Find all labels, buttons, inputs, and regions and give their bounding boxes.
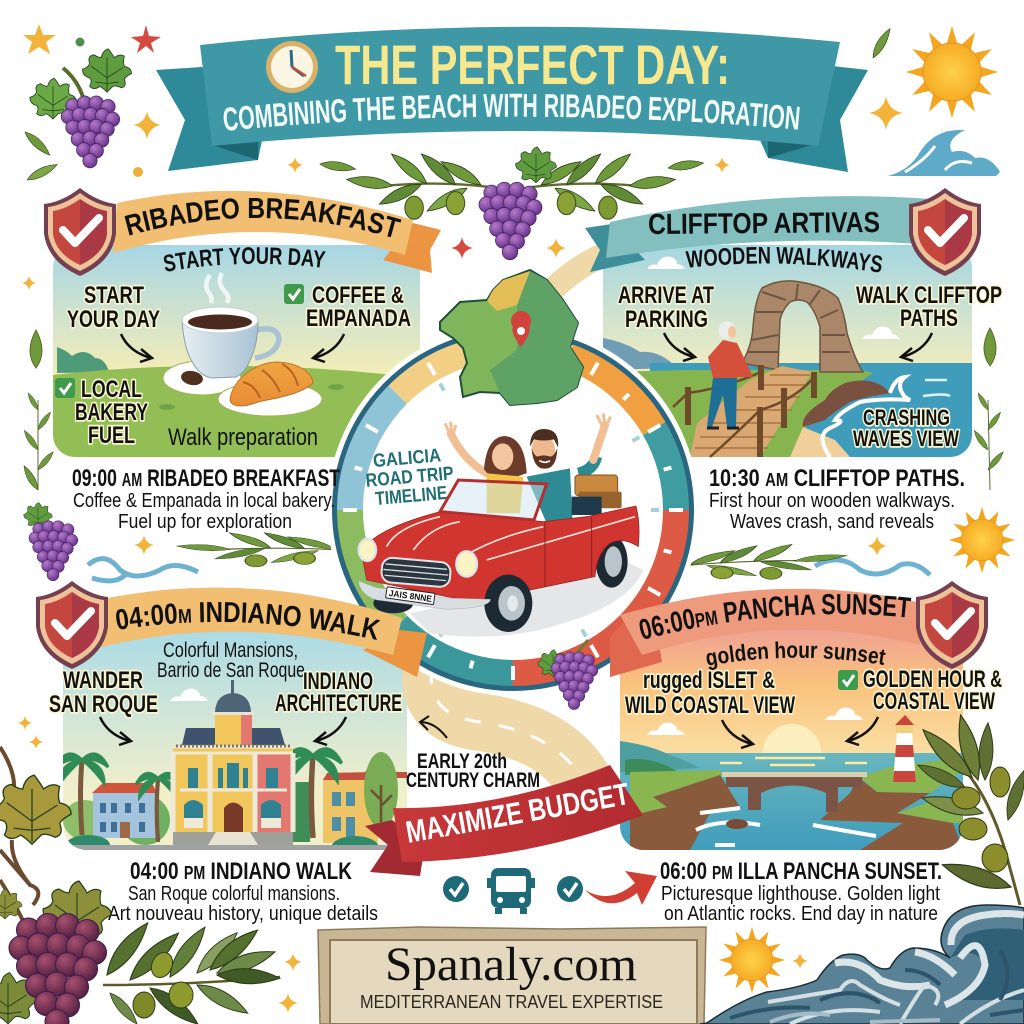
- panel scene background: [603, 245, 972, 463]
- panel text: Pancha sunset labels: [624, 642, 1003, 750]
- decorative side elements left: [21, 330, 345, 581]
- winding road: [431, 668, 592, 800]
- panel: Ribadeo breakfast: [53, 245, 420, 457]
- headlights: [359, 539, 477, 577]
- wave: [700, 905, 1024, 1024]
- time block: Illa Pancha sunset: 06:00 PM ILLA PANCHA SUNSET.: [660, 858, 942, 885]
- road piece toward the map: [548, 254, 605, 295]
- brand name: Spanaly.com: [385, 938, 637, 991]
- map of Galicia: [440, 270, 583, 405]
- wheels: [373, 593, 413, 613]
- windshield: [440, 480, 547, 520]
- label: Galicia road trip timeline: TIMELINE: [375, 483, 448, 510]
- licence plate: JAIS 8NNE: [388, 588, 433, 604]
- arrow: [664, 333, 695, 361]
- bottom-left vine, leaves, grapes, olive branch: [0, 716, 302, 1024]
- time block: Ribadeo breakfast: Coffee & Empanada in local bakery.: [73, 489, 335, 512]
- illustration: couple in red convertible: [358, 413, 643, 637]
- icon: lighthouse: [893, 715, 916, 782]
- decorative side elements right: [676, 328, 1015, 583]
- road shadow: [410, 560, 643, 637]
- panel text: Indiano walk labels: WANDER: [63, 667, 143, 694]
- footer plaque: [318, 927, 706, 1024]
- label: local bakery fuel: [55, 376, 148, 449]
- decorative corner cluster: top left grapes: [22, 24, 161, 290]
- label: start your day: START: [84, 282, 144, 309]
- title banner: [156, 26, 868, 172]
- label: crashing waves view: WAVES VIEW: [853, 426, 959, 451]
- label: crashing waves view: [853, 405, 959, 451]
- label: local bakery fuel: LOCAL: [81, 376, 142, 403]
- tagline: MEDITERRANEAN TRAVEL EXPERTISE: [360, 992, 663, 1012]
- ribbon: 04:00M Indiano walk: 04:00M INDIANO WALK: [116, 602, 380, 640]
- time block: Clifftop paths: [709, 465, 965, 533]
- timeline ring ticks: [343, 363, 683, 680]
- icon: shield check: [916, 581, 988, 669]
- time block: Indiano walk: [108, 858, 378, 925]
- label: local bakery fuel: FUEL: [88, 422, 135, 449]
- label: crashing waves view: CRASHING: [863, 405, 950, 430]
- arrow: [420, 716, 447, 738]
- subtitle on curved path: COMBINING THE BEACH WITH RIBADEO EXPLORATION: [224, 94, 800, 131]
- panel text: Indiano walk labels: [49, 639, 402, 745]
- label: walk clifftop paths: [856, 282, 1002, 332]
- ribbon: 04:00M Indiano walk: [100, 588, 427, 677]
- time block: Ribadeo breakfast: [72, 465, 340, 533]
- time block: Indiano walk: San Roque colorful mansions.: [128, 882, 340, 905]
- panel text: Indiano walk labels: ARCHITECTURE: [275, 690, 402, 717]
- icon: wooden walkway: [673, 365, 814, 457]
- icon: hiker: [707, 322, 753, 428]
- panel text: Indiano walk labels: Barrio de San Roque: [157, 659, 305, 682]
- arrow: [901, 333, 932, 361]
- icon: shield check: [909, 188, 981, 276]
- road and timeline hub: [327, 270, 699, 800]
- time block: Illa Pancha sunset: Picturesque lighthouse. Golden light: [661, 882, 940, 905]
- label: coffee and empanada: [284, 282, 411, 332]
- icon: coffee cup: [163, 273, 279, 395]
- bottom-right wave, sun, olive branch: [700, 713, 1024, 1024]
- car trim: [387, 517, 635, 560]
- label: wooden walkways heading: WOODEN WALKWAYS: [685, 247, 882, 272]
- icon row: bus and checks: [443, 868, 657, 914]
- label: arrive at parking: ARRIVE AT: [618, 282, 714, 309]
- grille: [381, 557, 451, 588]
- arrow: red: [585, 871, 657, 905]
- olive branch: right: [915, 713, 1024, 905]
- arrow: [121, 334, 152, 362]
- label: arrive at parking: PARKING: [625, 306, 708, 333]
- label: Galicia road trip timeline: GALICIA: [372, 445, 442, 472]
- icon: shield check: [44, 188, 116, 276]
- time block: Indiano walk: 04:00 PM INDIANO WALK: [130, 858, 353, 885]
- time block: Illa Pancha sunset: [660, 858, 942, 925]
- time block: Ribadeo breakfast: 09:00 AM RIBADEO BREAKFAST: [72, 465, 340, 492]
- label: walk clifftop paths: PATHS: [900, 305, 958, 332]
- time block: Clifftop paths: First hour on wooden walkways.: [709, 489, 955, 512]
- icon: bus: [487, 868, 535, 914]
- panel text: Pancha sunset labels: WILD COASTAL VIEW: [625, 692, 795, 719]
- icon: clock: [266, 41, 318, 93]
- ribbon: Clifftop Artivas: CLIFFTOP ARTIVAS: [648, 207, 880, 241]
- panel scene: Indiano walk: [56, 625, 407, 860]
- label: start your day: [67, 282, 160, 333]
- icon: shield check: [36, 581, 108, 669]
- panel text: Indiano walk labels: Colorful Mansions,: [163, 639, 298, 662]
- panel text: Pancha sunset labels: rugged ISLET &: [643, 667, 775, 694]
- bumper: [358, 581, 491, 609]
- label: walk preparation: Walk preparation: [168, 424, 318, 451]
- title text: THE PERFECT DAY:: [335, 33, 730, 96]
- banner: maximize budget: [365, 765, 643, 876]
- ribbon: 06:00PM Pancha sunset: 06:00PM PANCHA SUNSET: [640, 594, 912, 639]
- time block: Clifftop paths: 10:30 AM CLIFFTOP PATHS.: [709, 465, 965, 492]
- label: arrive at parking: [618, 282, 714, 333]
- time block: Ribadeo breakfast: Fuel up for exploration: [118, 510, 292, 533]
- label: early 20th century charm: EARLY 20th: [417, 750, 507, 773]
- timeline ring segments: [350, 353, 676, 673]
- couple: [445, 413, 611, 523]
- time block: Indiano walk: Art nouveau history, unique details: [108, 902, 378, 925]
- luggage: [572, 475, 622, 515]
- ribbon: 06:00PM Pancha sunset: [610, 588, 920, 677]
- timeline ring outline: [335, 332, 691, 688]
- ribbon: Ribadeo Breakfast: RIBADEO BREAKFAST: [124, 198, 402, 238]
- decorative grapes on ring: [538, 640, 598, 710]
- panel text: Indiano walk labels: SAN ROQUE: [49, 691, 158, 718]
- decorative top centre vine with grapes: [287, 147, 730, 260]
- ribbon: Ribadeo Breakfast: [113, 190, 441, 273]
- panel text: Indiano walk labels: INDIANO: [303, 668, 373, 695]
- panel scene background: [53, 245, 420, 457]
- car body: [362, 506, 639, 603]
- time block: Illa Pancha sunset: on Atlantic rocks. End day in nature: [664, 902, 938, 925]
- label: start your day: YOUR DAY: [67, 306, 160, 333]
- panel scene: Pancha sunset: [620, 625, 963, 853]
- panel: Clifftop Artivas: [603, 245, 1003, 458]
- icon: stone arch: [742, 281, 863, 372]
- time block: Clifftop paths: Waves crash, sand reveals: [730, 510, 934, 533]
- banner: maximize budget: MAXIMIZE BUDGET: [403, 776, 632, 850]
- road centre dashes: [431, 668, 592, 800]
- ribbon: Clifftop Artivas: [585, 196, 945, 272]
- white ring halo: [327, 324, 699, 696]
- arrow: [313, 334, 344, 362]
- label: start your day heading: START YOUR DAY: [164, 247, 326, 272]
- panel text: Pancha sunset labels: golden hour sunset: [706, 642, 886, 670]
- icon: Indiano mansion: [173, 680, 293, 845]
- label: coffee and empanada: COFFEE &: [312, 282, 404, 309]
- label: Galicia road trip timeline: ROAD TRIP: [365, 463, 455, 492]
- icon: stone bridge: [722, 772, 867, 812]
- icon: croissant on plate: [218, 362, 322, 416]
- label: local bakery fuel: BAKERY: [75, 399, 148, 426]
- label: early 20th century charm: CENTURY CHARM: [406, 769, 540, 792]
- label: early 20th century charm: [406, 750, 540, 792]
- decorative top-right sun and wave: [869, 26, 1000, 176]
- label: Galicia road trip timeline: [363, 444, 456, 511]
- label: coffee and empanada: EMPANADA: [306, 305, 411, 332]
